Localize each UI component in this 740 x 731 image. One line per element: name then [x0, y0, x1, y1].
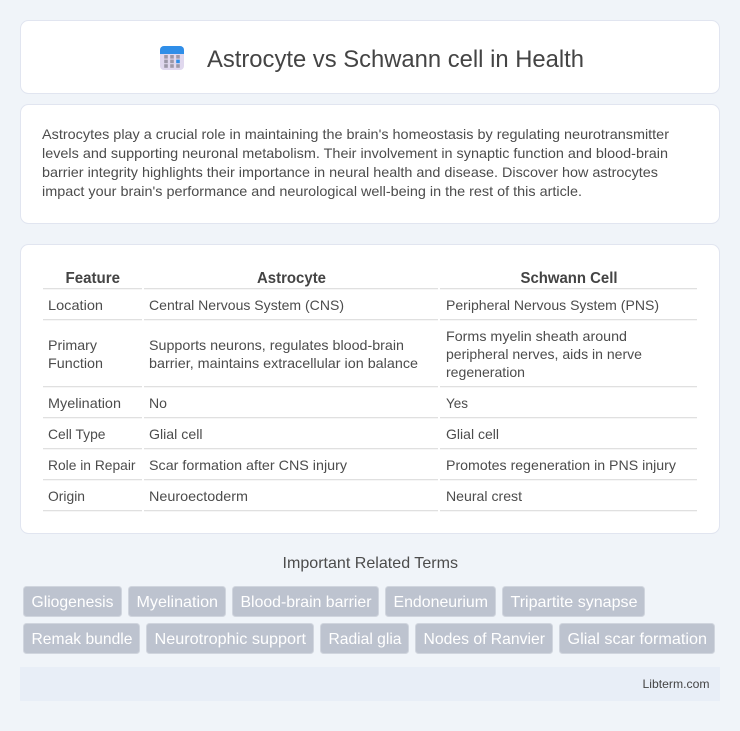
- table row: primary function: barrier, maintains extracellular ion balance: [149, 355, 418, 371]
- tag: Neurotrophic support: [146, 624, 314, 654]
- table row: origin: [43, 488, 697, 511]
- table row: primary function: Primary: [48, 337, 97, 353]
- table row: role in repair: Scar formation after CNS injury: [149, 457, 347, 473]
- table row: primary function: regeneration: [446, 364, 525, 380]
- table row: role in repair: Role in Repair: [48, 457, 136, 473]
- table row: myelination: No: [149, 395, 167, 411]
- panel: related term tags: [24, 586, 714, 654]
- table row: location: Central Nervous System (CNS): [149, 297, 344, 313]
- tag: Gliogenesis: [24, 586, 122, 616]
- tag: Nodes of Ranvier: [416, 624, 552, 654]
- footer: [20, 667, 720, 701]
- heading: related terms: Important Related Terms: [282, 555, 458, 572]
- table header row: Schwann Cell: [520, 270, 618, 287]
- table header row: Feature: [66, 270, 120, 287]
- panel: comparison table: [20, 244, 720, 534]
- tag: Gliogenesis: Gliogenesis: [32, 594, 114, 611]
- table row: origin: Origin: [48, 488, 85, 504]
- table row: location: [43, 297, 697, 320]
- text block: introduction: Astrocytes play a crucial role in maintaining the brain's homeostasis by regulating neurotransmitter: [42, 126, 669, 142]
- title: Astrocyte vs Schwann cell in Health: [207, 46, 584, 73]
- tag: Glial scar formation: [560, 624, 714, 654]
- table row: myelination: [43, 395, 697, 418]
- tag: Glial scar formation: Glial scar formation: [568, 631, 707, 648]
- table row: primary function: Supports neurons, regulates blood-brain: [149, 337, 404, 353]
- icon: calendar: [160, 46, 184, 70]
- tag: Nodes of Ranvier: Nodes of Ranvier: [424, 631, 546, 648]
- table row: cell type: [43, 426, 697, 449]
- tag: Blood-brain barrier: [232, 586, 378, 616]
- footer: Libterm.com: [642, 677, 710, 691]
- tag: Myelination: [128, 586, 226, 616]
- table row: location: Location: [48, 297, 103, 313]
- tag: Endoneurium: Endoneurium: [394, 594, 488, 611]
- table row: primary function: Function: [48, 355, 103, 371]
- text block: introduction: barrier integrity highlights their importance in neural health and disease. Discover how astrocytes: [42, 164, 658, 180]
- table row: role in repair: [43, 457, 697, 480]
- table row: myelination: Myelination: [48, 395, 121, 411]
- table row: primary function: [43, 328, 697, 387]
- table row: cell type: Glial cell: [149, 426, 202, 442]
- tag: Neurotrophic support: Neurotrophic support: [154, 631, 307, 648]
- panel: introduction: [20, 104, 720, 224]
- tag: Remak bundle: [24, 624, 140, 654]
- table row: primary function: peripheral nerves, aids in nerve: [446, 346, 642, 362]
- table row: role in repair: Promotes regeneration in PNS injury: [446, 457, 676, 473]
- tag: Tripartite synapse: Tripartite synapse: [510, 594, 638, 611]
- text block: introduction: [42, 126, 669, 199]
- table header row: Astrocyte: [257, 270, 326, 287]
- text block: introduction: impact your brain's performance and neurological well-being in the rest of this article.: [42, 183, 582, 199]
- table row: primary function: Forms myelin sheath around: [446, 328, 627, 344]
- tag: Endoneurium: [386, 586, 496, 616]
- tag: Tripartite synapse: [502, 586, 644, 616]
- table row: myelination: Yes: [446, 395, 468, 411]
- tag: Radial glia: [320, 624, 408, 654]
- table row: cell type: Cell Type: [48, 426, 106, 442]
- text block: introduction: levels and supporting neuronal metabolism. Their involvement in synaptic function and blood-brain: [42, 145, 668, 161]
- table header row: [43, 270, 697, 289]
- table row: location: Peripheral Nervous System (PNS): [446, 297, 659, 313]
- tag: Myelination: Myelination: [136, 594, 218, 611]
- panel: header: [20, 20, 720, 94]
- table row: origin: Neuroectoderm: [149, 488, 248, 504]
- tag: Blood-brain barrier: Blood-brain barrier: [240, 594, 372, 611]
- tag: Radial glia: Radial glia: [328, 631, 402, 648]
- table row: origin: Neural crest: [446, 488, 522, 504]
- table row: cell type: Glial cell: [446, 426, 499, 442]
- tag: Remak bundle: Remak bundle: [32, 631, 133, 648]
